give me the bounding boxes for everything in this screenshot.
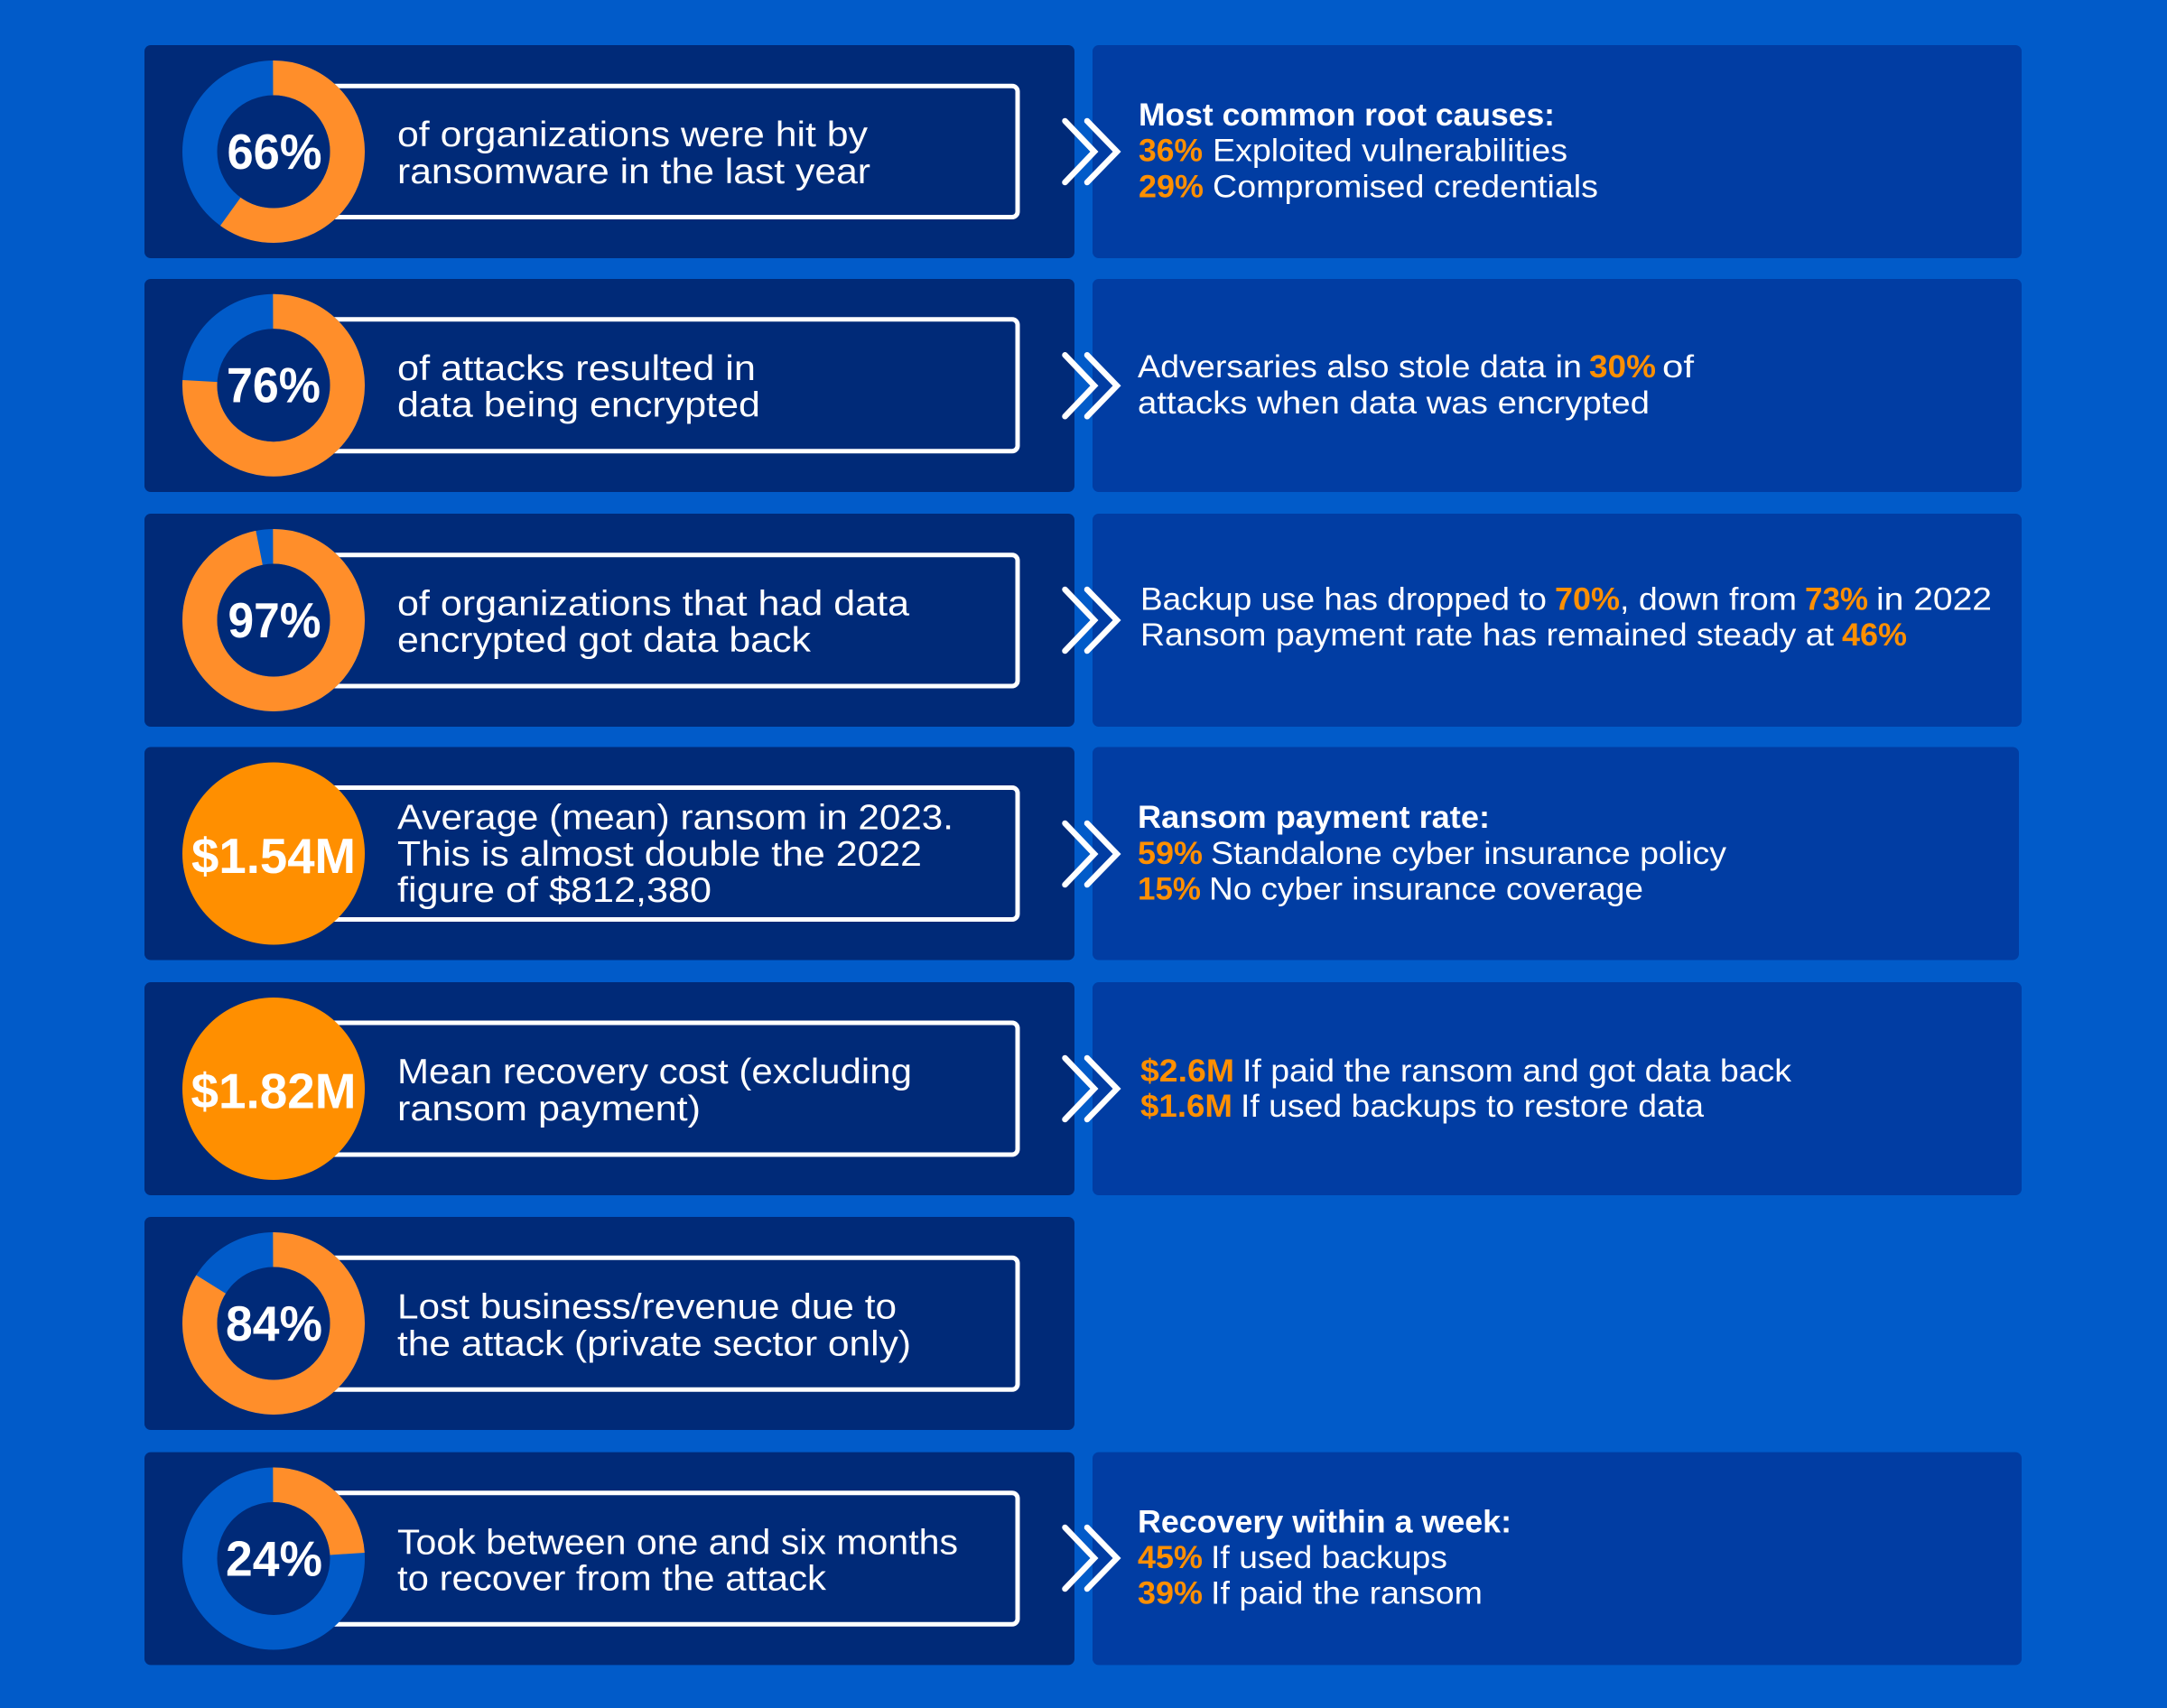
outline box [271, 1023, 1018, 1155]
value: 24%: 24% [226, 1530, 322, 1586]
description: encrypted got data back [397, 621, 812, 660]
backups and payment text: Backup use has dropped to [1140, 581, 1547, 617]
row 6: lost revenue [144, 1217, 1074, 1430]
value: 76%: 76% [227, 357, 321, 413]
ransom payment text: Standalone cyber insurance policy [1211, 835, 1726, 871]
panel: stat 84% [144, 1217, 1074, 1430]
data theft text: of [1662, 348, 1694, 385]
cost comparison text: $2.6M [1140, 1053, 1234, 1089]
description [397, 349, 760, 424]
panel: stat $1.54M [144, 747, 1074, 961]
panel: data theft [1093, 279, 2022, 492]
description: Lost business/revenue due to [397, 1288, 897, 1327]
row 1: hit by ransomware [144, 45, 2022, 258]
value: 66%: 66% [228, 124, 321, 180]
panel: backups and payment [1093, 514, 2022, 727]
description [397, 116, 870, 191]
arrow: double chevron [1065, 589, 1117, 651]
outline box [271, 1258, 1018, 1389]
root causes text: Most common root causes: [1139, 97, 1555, 133]
ransom payment text: 59% [1138, 835, 1203, 871]
ransom payment text [1138, 799, 1726, 906]
description [397, 1288, 911, 1363]
backups and payment text: 73% [1805, 581, 1868, 617]
panel: root causes [1093, 45, 2022, 258]
root causes text: 29% [1139, 168, 1204, 204]
data theft text: Adversaries also stole data in [1138, 348, 1582, 385]
description: of attacks resulted in [397, 349, 756, 388]
root causes text [1139, 97, 1598, 204]
donut: 24% [182, 1468, 365, 1650]
panel: stat 97% [144, 514, 1074, 727]
description: to recover from the attack [397, 1560, 827, 1599]
description [397, 1053, 912, 1128]
solid circle: $1.82M [182, 998, 365, 1180]
solid circle: $1.54M [182, 762, 365, 944]
arrow: double chevron [1065, 823, 1117, 885]
backups and payment text: Ransom payment rate has remained steady at [1140, 617, 1834, 653]
row 3: data recovered [144, 514, 2022, 727]
recovery text [1138, 1503, 1511, 1611]
row 2: data encrypted [144, 279, 2022, 492]
panel: stat 66% [144, 45, 1074, 258]
recovery text: If paid the ransom [1211, 1575, 1483, 1611]
value: 84%: 84% [226, 1295, 322, 1351]
recovery text: Recovery within a week: [1138, 1503, 1511, 1539]
panel: recovery within a week [1093, 1453, 2022, 1665]
outline box [271, 320, 1018, 451]
cost comparison text [1140, 1053, 1791, 1124]
value: $1.82M: $1.82M [191, 1063, 356, 1119]
value: 97%: 97% [228, 592, 321, 648]
arrow: double chevron [1065, 355, 1117, 416]
panel: cost comparison [1093, 982, 2022, 1195]
value: $1.54M: $1.54M [191, 828, 356, 884]
cost comparison text: $1.6M [1140, 1088, 1232, 1124]
recovery text: 39% [1138, 1575, 1203, 1611]
description [397, 585, 909, 660]
donut: 97% [182, 529, 365, 711]
description: Took between one and six months [397, 1523, 958, 1562]
outline box [271, 1493, 1018, 1624]
outline box [271, 555, 1018, 686]
description: of organizations that had data [397, 585, 909, 623]
arrow: double chevron [1065, 1058, 1117, 1119]
panel: stat 76% [144, 279, 1074, 492]
backups and payment text: in 2022 [1876, 581, 1992, 617]
arrow: double chevron [1065, 1527, 1117, 1589]
data theft text: 30% [1589, 348, 1656, 385]
arrow: double chevron [1065, 121, 1117, 182]
donut: 84% [182, 1232, 365, 1415]
description: Mean recovery cost (excluding [397, 1053, 912, 1091]
description: of organizations were hit by [397, 116, 869, 154]
donut: 76% [182, 294, 365, 477]
root causes text: Compromised credentials [1213, 168, 1598, 204]
ransom payment text: 15% [1138, 870, 1201, 906]
description: the attack (private sector only) [397, 1324, 911, 1363]
cost comparison text: If used backups to restore data [1241, 1088, 1704, 1124]
root causes text: Exploited vulnerabilities [1213, 132, 1567, 168]
description [397, 798, 953, 910]
panel: stat 24% [144, 1453, 1074, 1665]
description: ransomware in the last year [397, 153, 870, 191]
row 5: recovery cost [144, 982, 2022, 1195]
backups and payment text: 46% [1842, 617, 1907, 653]
backups and payment text [1140, 581, 1992, 653]
backups and payment text: 70% [1555, 581, 1620, 617]
panel: ransom payment rate [1093, 747, 2019, 961]
panel: stat $1.82M [144, 982, 1074, 1195]
data theft text [1138, 348, 1694, 421]
description: This is almost double the 2022 [397, 835, 922, 874]
recovery text: If used backups [1211, 1539, 1447, 1575]
outline box [271, 787, 1018, 919]
description: ransom payment) [397, 1090, 701, 1128]
row 4: average ransom [144, 747, 2019, 961]
outline box [271, 86, 1018, 217]
root causes text: 36% [1139, 132, 1203, 168]
cost comparison text: If paid the ransom and got data back [1242, 1053, 1791, 1089]
donut: 66% [182, 60, 365, 243]
description: data being encrypted [397, 385, 760, 424]
ransom payment text: No cyber insurance coverage [1209, 870, 1643, 906]
backups and payment text: , down from [1620, 581, 1797, 617]
description: Average (mean) ransom in 2023. [397, 798, 953, 838]
row 7: time to recover [144, 1453, 2022, 1665]
recovery text: 45% [1138, 1539, 1203, 1575]
ransom payment text: Ransom payment rate: [1138, 799, 1490, 835]
data theft text: attacks when data was encrypted [1138, 385, 1650, 421]
description [397, 1523, 958, 1599]
description: figure of $812,380 [397, 871, 711, 910]
